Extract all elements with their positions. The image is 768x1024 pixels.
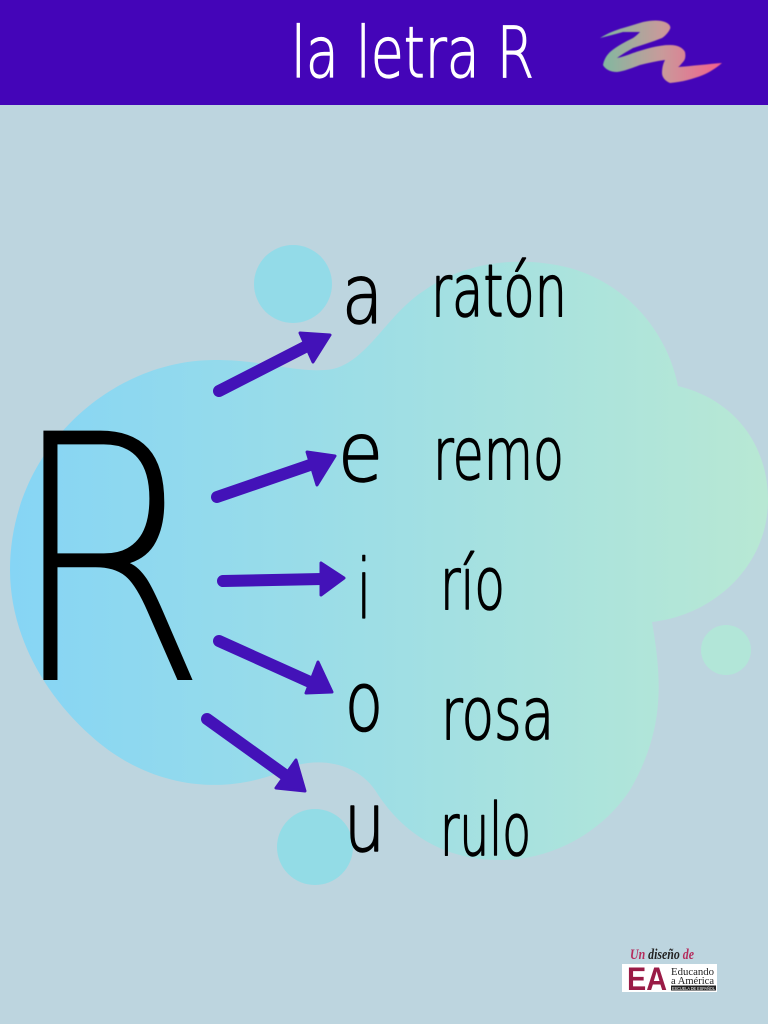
background blob [10,262,768,860]
circle right [701,625,751,675]
logo: Educando a América: Un diseño de [630,947,694,963]
circle bottom [277,809,353,885]
words: rulo [440,788,531,872]
title: la letra R [291,12,534,94]
icon: paint brush stroke [600,20,722,83]
vowels: u [344,776,385,871]
vowels: i [357,543,371,638]
big letter R: R [8,363,208,761]
words: remo [433,412,564,496]
logo: Educando a América: Educando [671,967,714,978]
arrow to o [219,641,332,693]
arrow to e [217,452,335,497]
vowels: e [338,406,383,501]
vowels: a [342,248,383,343]
logo: Educando a América: a América [671,976,715,987]
arrow to u [207,719,305,791]
words: rosa [441,672,554,756]
words [431,249,567,872]
circle top [254,245,332,323]
logo: Educando a América: EA [627,961,667,997]
logo: Educando a América: ESCUELA DE ESPAÑOL [672,985,715,991]
vowels: o [345,655,383,750]
logo: Educando a América [622,947,717,997]
arrow to a [219,333,330,391]
words: río [440,542,505,626]
arrow to i [223,563,344,595]
vowels [338,248,385,871]
words: ratón [431,249,567,333]
header bar [0,0,768,105]
